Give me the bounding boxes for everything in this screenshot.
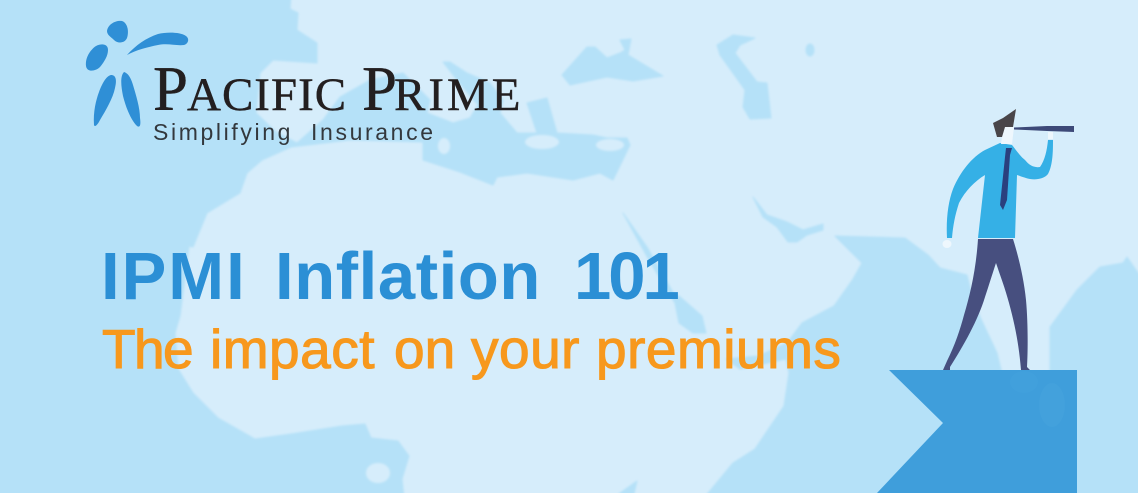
platform: arrow-shaped cliff	[877, 370, 1077, 493]
logo wordmark: P	[153, 54, 188, 124]
logo wordmark: RIME	[394, 69, 524, 121]
subtitle: premiums	[596, 318, 841, 380]
telescope	[1014, 126, 1074, 132]
logo tagline: Simplifying Insurance	[153, 119, 433, 145]
logo: Pacific Prime	[86, 21, 523, 145]
logo wordmark: P	[362, 54, 397, 124]
title: Inflation	[275, 239, 560, 314]
hands	[942, 132, 1053, 248]
shirt	[947, 140, 1053, 238]
icon: logo figure	[86, 21, 188, 127]
subtitle: on	[394, 318, 470, 380]
subtitle: impact	[210, 318, 391, 380]
title: 101	[574, 239, 679, 314]
tie	[1000, 148, 1012, 210]
hair	[993, 109, 1016, 137]
subtitle: your	[471, 318, 596, 380]
logo wordmark: ACIFIC	[187, 69, 360, 121]
title: IPMI	[101, 239, 267, 314]
face	[1001, 127, 1014, 144]
subtitle: The	[102, 318, 206, 380]
trousers	[943, 239, 1030, 370]
icon: man looking through telescope	[942, 109, 1074, 370]
